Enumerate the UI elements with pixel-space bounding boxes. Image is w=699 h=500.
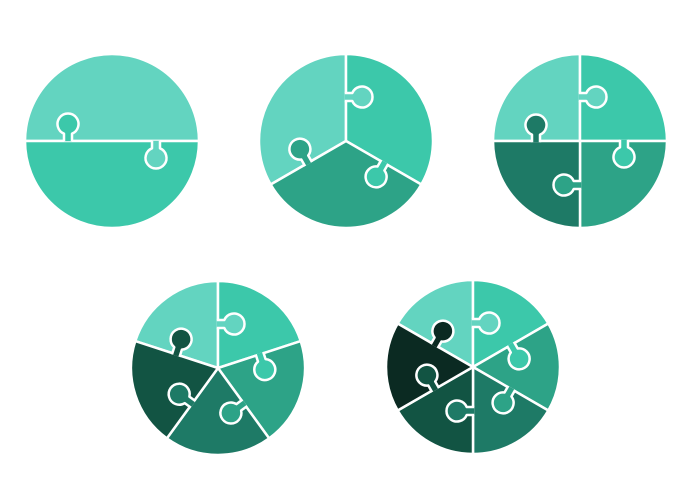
- puzzle circle: 6 pieces: [360, 258, 586, 476]
- puzzle circle: 4 pieces: [493, 54, 667, 228]
- puzzle circle: 5 pieces: [100, 262, 326, 487]
- puzzle circle: 2 pieces: [25, 54, 199, 228]
- puzzle circle: 3 pieces: [227, 44, 433, 260]
